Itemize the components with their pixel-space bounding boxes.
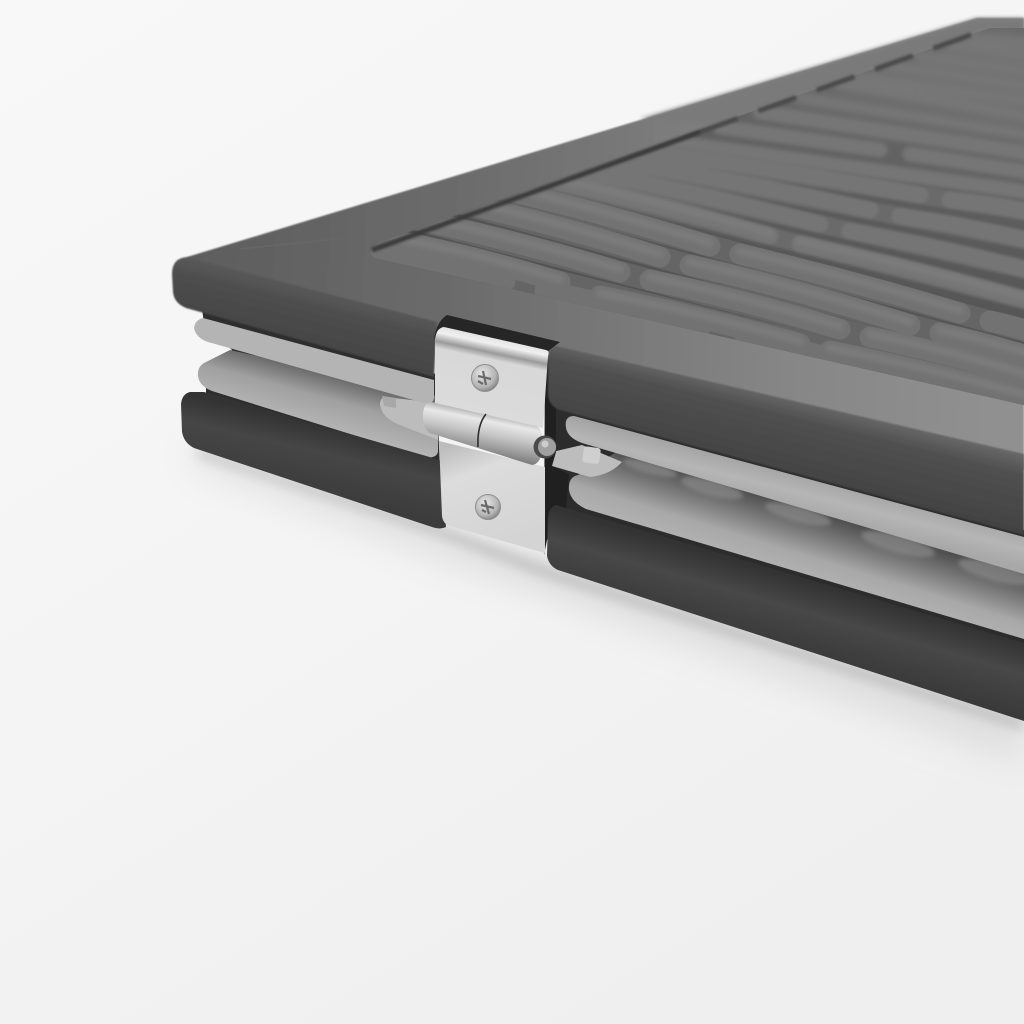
ridge highlights [392,173,1024,396]
dark gap behind left panels [202,308,440,470]
small link bracket at right of hinge [544,345,622,555]
hinge: pin end [534,436,556,458]
mat recess shadow along the back edge [372,28,990,250]
hinge: upper screw [472,364,498,392]
top frame: front face, right section [548,346,1024,535]
corner mitre line [240,238,345,249]
hinge: lower leaf [439,441,545,553]
hinge: lower screw [476,494,500,520]
near ridges: raised segments [378,184,1024,406]
middle ridges [530,149,1024,304]
spacer discs [621,455,1024,591]
near ridges: continuous under-row [414,200,1024,386]
top frame: far edge softening [640,18,1024,126]
light panel: lower left [198,350,438,457]
light panel: upper left [194,318,434,403]
hinge recess shadow [434,315,560,352]
photo scene: folded mat with hinge [171,15,1024,768]
cast shadow under the mat [190,445,1024,760]
bottom frame: left section [181,392,446,528]
upper middle ridges [660,112,1024,194]
top frame: front face, left section [172,257,437,377]
light panel: lower right with spacer discs [569,450,1024,639]
dark gap behind right panels [550,405,1024,650]
top frame: top surface [187,18,1024,470]
light panel: upper right [566,416,1024,574]
hinge: upper leaf [435,327,549,428]
textured mat: recessed ridges [360,20,1024,420]
hinge: barrel [423,402,543,465]
far ridges [800,38,1024,137]
bottom frame: right section [547,505,1024,721]
